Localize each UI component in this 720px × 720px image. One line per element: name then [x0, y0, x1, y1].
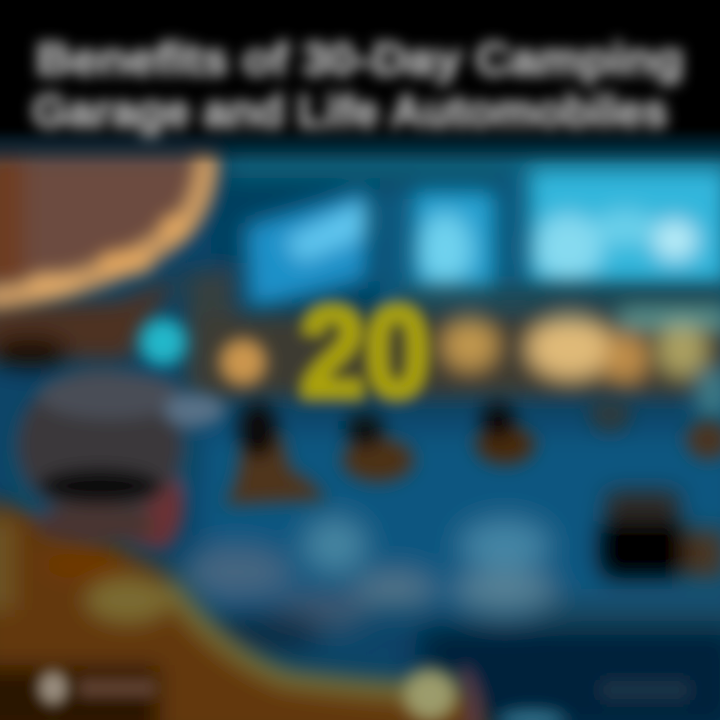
ceiling dome, top left: [0, 152, 210, 368]
screen: right: [528, 168, 720, 286]
screen: left: [245, 190, 368, 310]
foreground person: cap: [6, 369, 225, 550]
back wall with screens: [185, 135, 720, 395]
title: [32, 33, 684, 137]
ceiling dome glow rim: [0, 155, 206, 298]
watermark: bottom right: [600, 680, 690, 700]
blue highlight, bottom edge: [498, 710, 566, 720]
pale hand highlight: [404, 668, 474, 720]
title band: [0, 0, 720, 165]
orange lamp: [220, 339, 266, 385]
foreground person: jacket: [0, 500, 490, 720]
number 20 on the wall: 20: [300, 281, 430, 424]
warm band of lights: [200, 288, 720, 420]
teal lamp: [140, 319, 186, 365]
title: Garage and Life Automobiles: [32, 85, 668, 137]
screen: centre: [412, 190, 496, 298]
watermark: bottom left logo: [38, 671, 156, 705]
title: Benefits of 30-Day Camping: [36, 33, 684, 85]
audience seating, lower area: [180, 430, 720, 720]
audience heads: [225, 397, 720, 505]
dark seated figure, right: [600, 490, 720, 578]
